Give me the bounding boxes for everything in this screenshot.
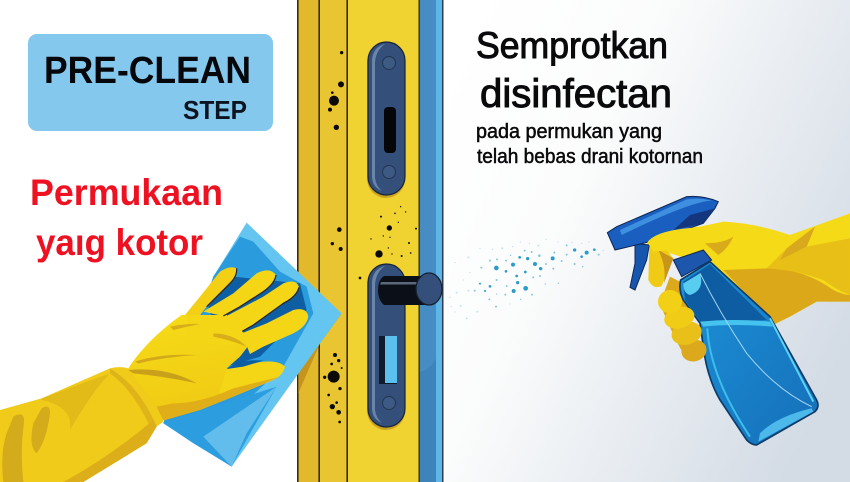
finger 1 [185, 267, 237, 315]
gripping fingers [679, 337, 709, 364]
trigger finger [648, 248, 673, 287]
label: pre-clean step: STEP [183, 95, 247, 125]
heading: dirty surface: yaıg kotor [36, 222, 203, 263]
folds [227, 360, 263, 369]
thumb over sprayer [647, 227, 705, 252]
palm [128, 315, 285, 420]
heading: spray instruction: pada permukan yang [476, 121, 662, 143]
finger 2 [203, 270, 276, 316]
thumb [217, 361, 285, 400]
arm [0, 367, 163, 482]
sprayer head [630, 243, 649, 290]
heading: spray instruction [476, 25, 703, 168]
bottle neck [673, 250, 712, 277]
bottle [680, 262, 818, 445]
stains on door [323, 51, 417, 423]
spray mist [449, 239, 604, 319]
finger edge shadows [207, 268, 299, 332]
label: pre-clean step [28, 34, 273, 131]
heading: dirty surface [30, 172, 223, 263]
icon: lower door plate with handle [367, 264, 442, 430]
knuckle patch [187, 315, 247, 347]
icon: top door plate [367, 42, 405, 198]
finger 4 [242, 309, 308, 354]
heading: spray instruction: Semprotkan [476, 25, 668, 66]
icon: gloved hand with spray bottle [607, 196, 850, 445]
label: pre-clean step: PRE-CLEAN [44, 50, 251, 92]
finger 3 [227, 282, 299, 332]
heading: spray instruction: telah bebas drani kotornan [477, 146, 703, 168]
icon: gloved hand wiping [0, 267, 308, 482]
palm behind bottle [660, 277, 697, 360]
heading: dirty surface: Permukaan [30, 172, 223, 213]
glove arm [647, 213, 850, 324]
heading: spray instruction: disinfectan [480, 72, 672, 116]
icon: cloth [163, 223, 342, 467]
panel: door [297, 0, 444, 482]
